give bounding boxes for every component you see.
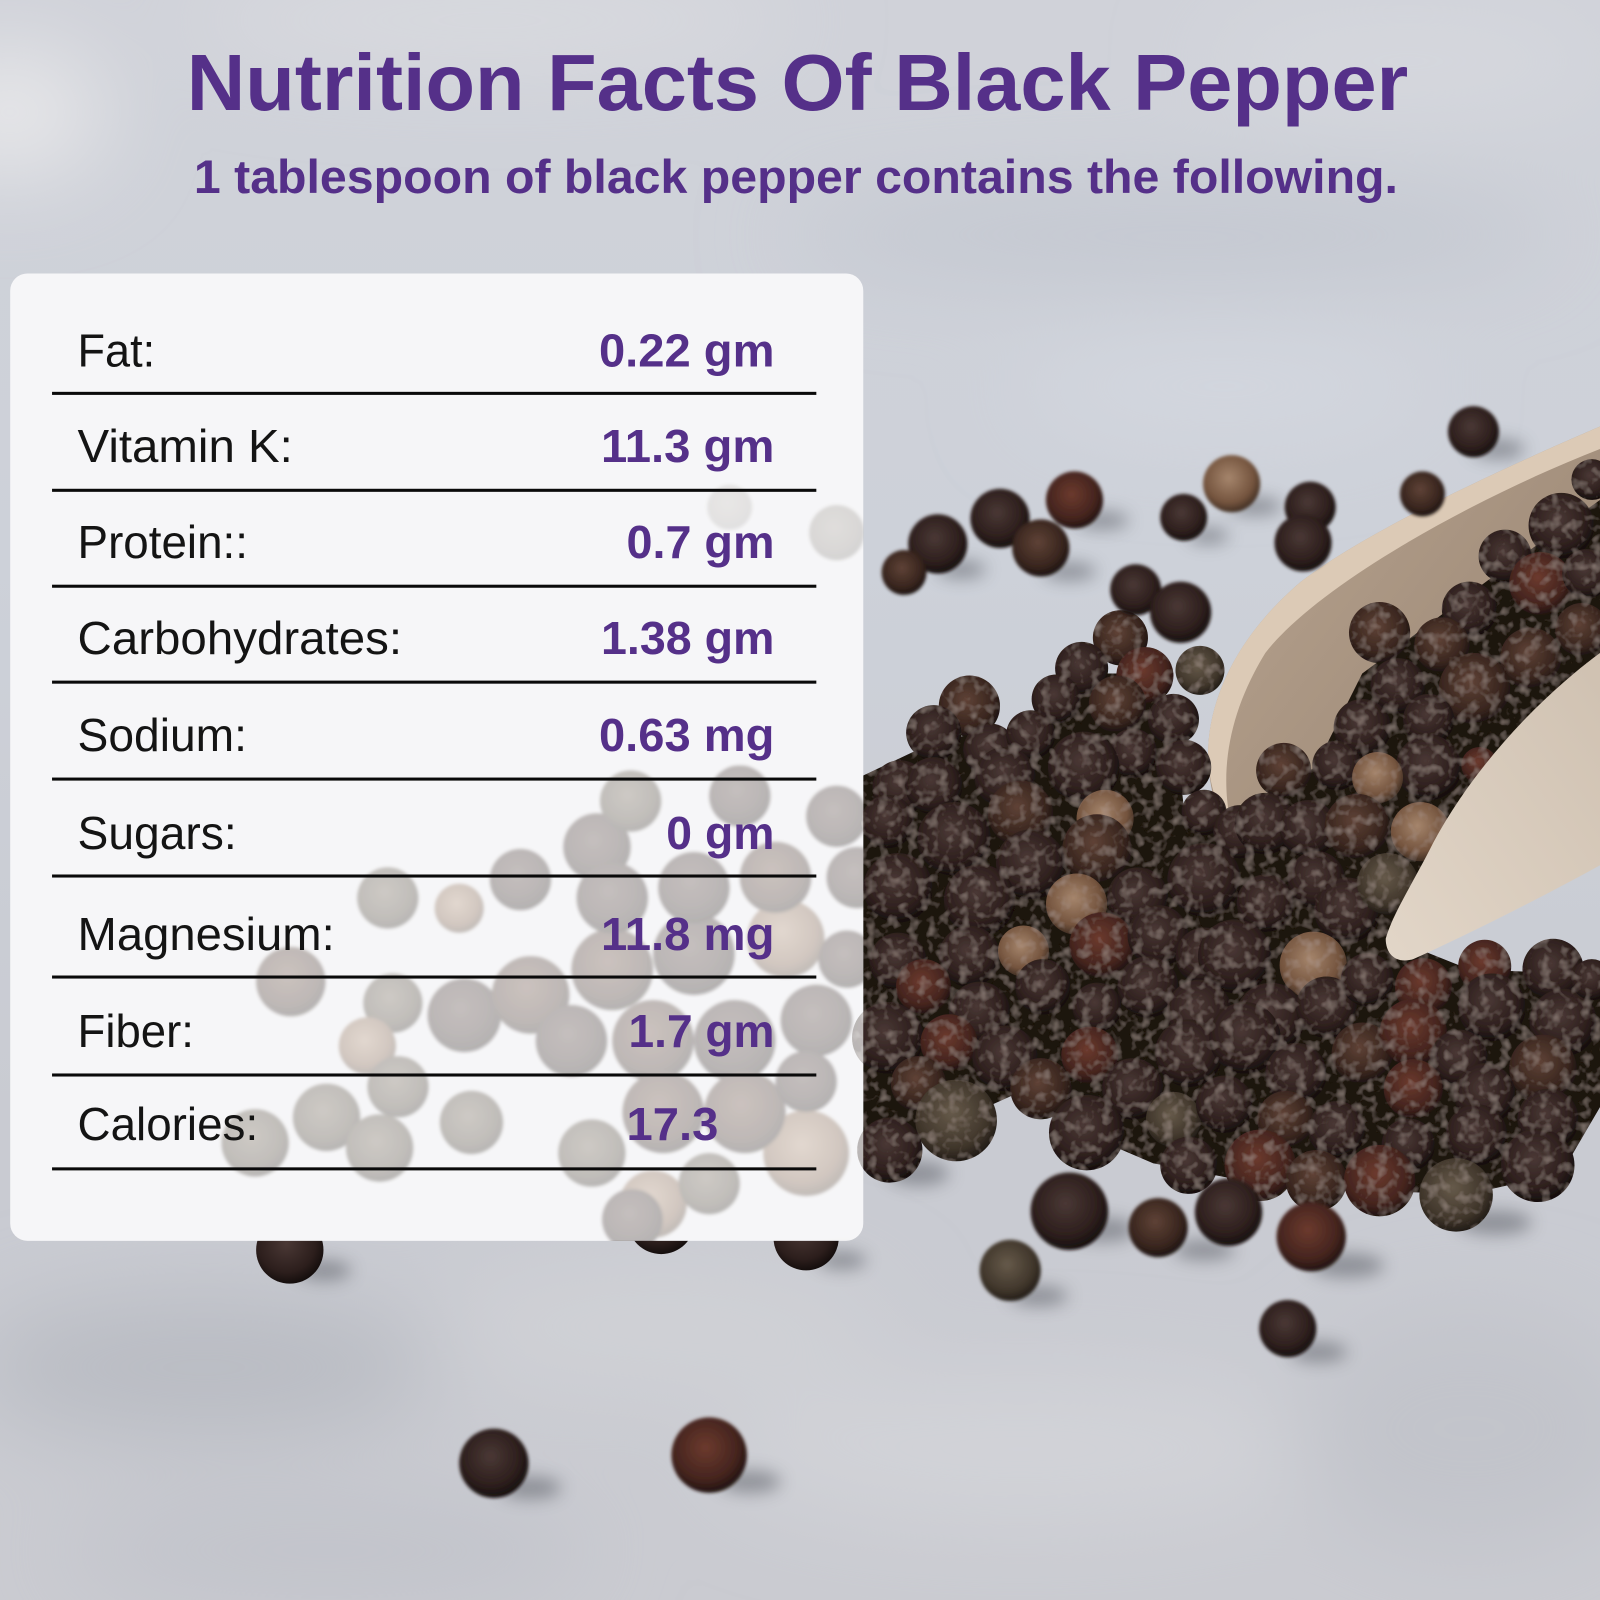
row: calories xyxy=(52,1098,816,1170)
row: calories: Calories: xyxy=(78,1098,258,1150)
row: vitamin k: 11.3 gm xyxy=(601,420,774,472)
translucent table panel xyxy=(10,273,863,1241)
scoop front lip xyxy=(1386,653,1600,961)
scoop rim xyxy=(1208,427,1600,832)
peppercorns below the panel edge xyxy=(256,1240,839,1284)
heap of peppercorns xyxy=(852,459,1600,1232)
row: magnesium: Magnesium: xyxy=(78,908,335,960)
scoop bowl xyxy=(1208,427,1600,944)
subtitle: 1 tablespoon of black pepper contains the following. xyxy=(194,151,1398,203)
row: sodium: 0.63 mg xyxy=(599,709,774,761)
row: sugars: 0 gm xyxy=(666,807,774,859)
row: protein: 0.7 gm xyxy=(627,516,774,568)
nutrition table xyxy=(52,324,816,1170)
row: sugars: Sugars: xyxy=(78,807,237,859)
row: fiber xyxy=(52,1005,816,1077)
scattered peppercorns xyxy=(459,406,1499,1498)
row: carbohydrates: 1.38 gm xyxy=(601,612,774,664)
row: sugars xyxy=(52,807,816,878)
row: fat: 0.22 gm xyxy=(599,324,774,376)
wooden scoop xyxy=(1208,427,1600,944)
peppercorns seen through the panel xyxy=(10,273,888,1250)
row: fiber: 1.7 gm xyxy=(629,1005,774,1057)
shadows under scattered peppercorns xyxy=(298,439,1532,1499)
row: carbohydrates xyxy=(52,612,816,684)
row: vitamin k: Vitamin K: xyxy=(78,420,293,472)
row: sodium xyxy=(52,709,816,781)
row: vitamin k xyxy=(52,420,816,492)
row: carbohydrates: Carbohydrates: xyxy=(78,612,402,664)
title: Nutrition Facts Of Black Pepper xyxy=(187,38,1408,127)
row: magnesium xyxy=(52,908,816,979)
row: calories: 17.3 xyxy=(627,1098,718,1150)
row: fat xyxy=(52,324,816,395)
row: protein: Protein:: xyxy=(78,516,248,568)
row: protein xyxy=(52,516,816,588)
row: fat: Fat: xyxy=(78,324,155,376)
row: magnesium: 11.8 mg xyxy=(601,908,774,960)
row: sodium: Sodium: xyxy=(78,709,247,761)
row: fiber: Fiber: xyxy=(78,1005,194,1057)
